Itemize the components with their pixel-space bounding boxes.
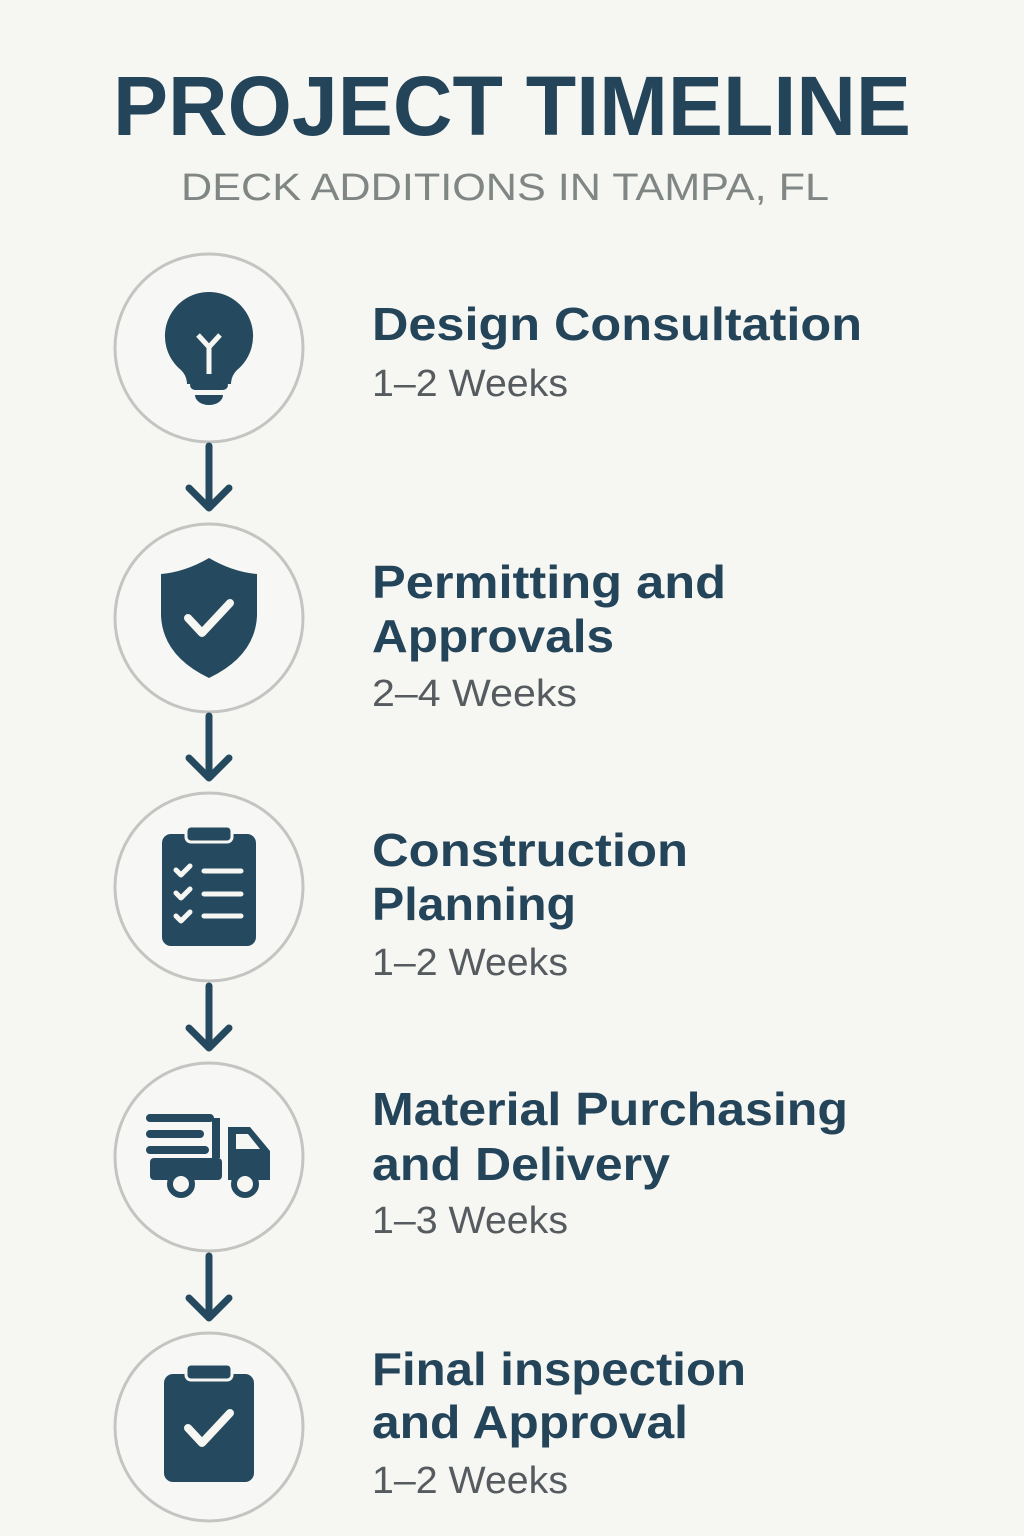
duration: 1–2 Weeks bbox=[372, 363, 568, 405]
arrow 3 bbox=[189, 986, 229, 1048]
duration: 1–2 Weeks bbox=[372, 942, 568, 984]
heading: Final inspection bbox=[372, 1343, 746, 1395]
step 5: final inspection bbox=[115, 1333, 746, 1521]
heading: Design Consultation bbox=[372, 298, 862, 350]
arrow 2 bbox=[189, 716, 229, 778]
arrow 1 bbox=[189, 446, 229, 508]
icon circle: lightbulb bbox=[115, 254, 303, 442]
step 4: material purchasing bbox=[115, 1063, 848, 1251]
icon circle: clipboard check bbox=[115, 1333, 303, 1521]
icon circle: checklist bbox=[115, 793, 303, 981]
icon circle: shield bbox=[115, 524, 303, 712]
arrow 4 bbox=[189, 1256, 229, 1318]
subtitle: DECK ADDITIONS IN TAMPA, FL bbox=[181, 167, 829, 209]
duration: 1–3 Weeks bbox=[372, 1200, 568, 1242]
step 3: construction planning: Planning bbox=[372, 878, 576, 930]
heading: Permitting and bbox=[372, 556, 726, 608]
title: PROJECT TIMELINE bbox=[113, 59, 911, 153]
duration: 2–4 Weeks bbox=[372, 673, 577, 715]
heading: Construction bbox=[372, 824, 688, 876]
step 3: construction planning bbox=[115, 793, 688, 984]
step 5: final inspection: and Approval bbox=[372, 1396, 688, 1448]
step 1: design consultation bbox=[115, 254, 862, 442]
step 2: permitting: Approvals bbox=[372, 610, 614, 662]
step 2: permitting bbox=[115, 524, 726, 715]
step 4: material purchasing: and Delivery bbox=[372, 1138, 670, 1190]
heading: Material Purchasing bbox=[372, 1083, 848, 1135]
icon circle: truck bbox=[115, 1063, 303, 1251]
duration: 1–2 Weeks bbox=[372, 1460, 568, 1502]
